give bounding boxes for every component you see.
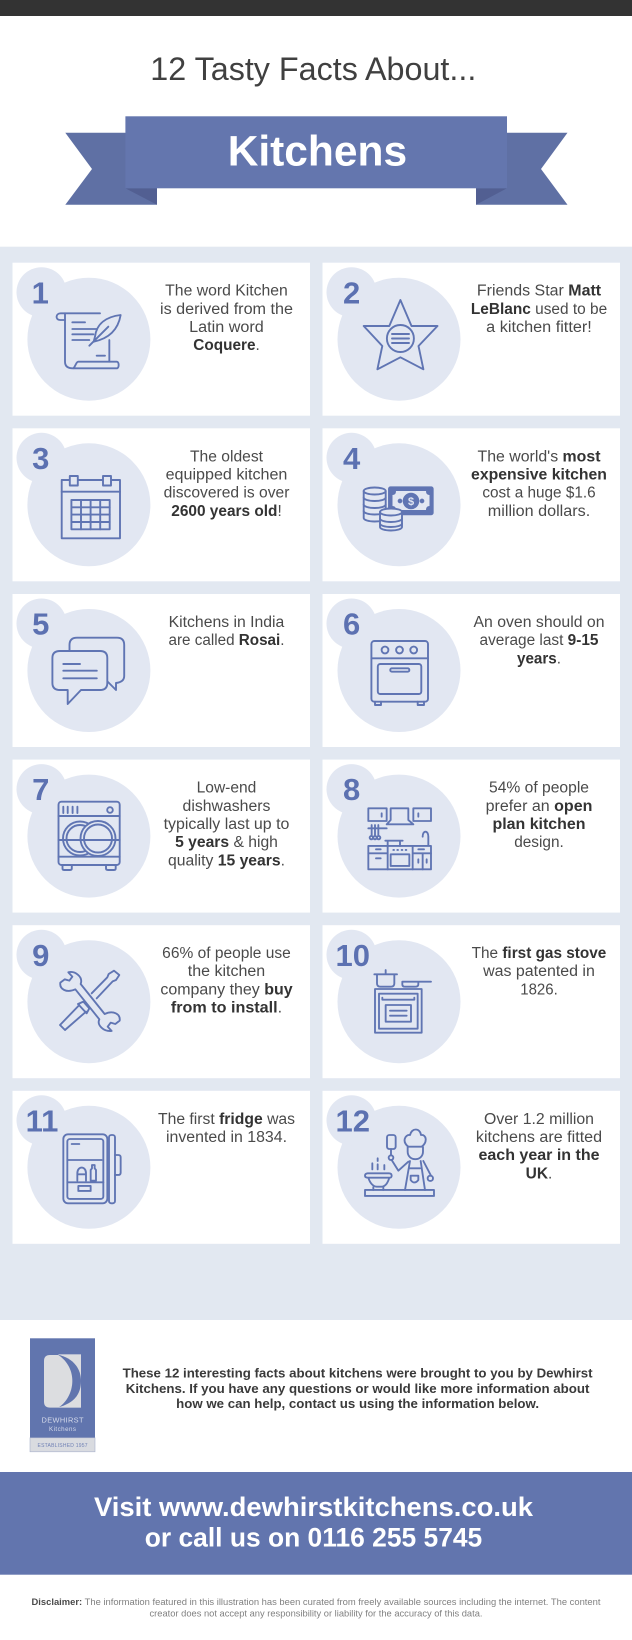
fact text: 54% of people	[489, 780, 589, 797]
ribbon centre	[125, 116, 507, 188]
fact text	[486, 780, 592, 851]
fact text: cost a huge $1.6	[482, 485, 596, 502]
icon: open fridge	[63, 1134, 121, 1203]
panel: fact 10	[322, 925, 620, 1078]
logo background	[30, 1338, 95, 1438]
card	[12, 925, 310, 1078]
fact text: invented in 1834.	[166, 1129, 287, 1146]
number 9: 9	[32, 938, 49, 973]
ribbon right tail	[476, 133, 568, 205]
logo established: ESTABLISHED 1957	[38, 1443, 88, 1449]
icon: oven	[371, 641, 428, 705]
title: 12 Tasty Facts About...	[150, 51, 476, 87]
closing text: Kitchens. If you have any questions or would like more information about	[126, 1381, 590, 1396]
card	[12, 263, 310, 416]
ribbon banner	[65, 116, 568, 205]
number 8: 8	[343, 772, 360, 807]
number 6: 6	[343, 607, 360, 642]
blob	[326, 598, 460, 732]
panel: fact 9	[12, 925, 310, 1078]
icon: speech bubbles	[52, 638, 124, 704]
fact text: Coquere.	[193, 337, 260, 354]
card	[12, 594, 310, 747]
fact text: plan kitchen	[492, 816, 586, 833]
panel: fact 5	[12, 594, 310, 747]
fact text: typically last up to	[164, 816, 289, 833]
fact text	[471, 448, 607, 520]
website line: Visit www.dewhirstkitchens.co.uk	[94, 1492, 534, 1522]
fact text: discovered is over	[164, 485, 289, 502]
logo: Dewhirst Kitchens	[30, 1338, 95, 1452]
fact text: company they buy	[160, 981, 293, 998]
blob	[16, 598, 150, 732]
card	[12, 1091, 310, 1244]
card	[12, 428, 310, 581]
blob	[16, 764, 150, 898]
blob	[16, 433, 150, 566]
number 1: 1	[32, 275, 49, 310]
blob	[326, 930, 460, 1063]
call to action bar	[0, 1472, 632, 1575]
fact text: expensive kitchen	[471, 466, 607, 484]
number 3: 3	[32, 441, 49, 476]
fact text: years.	[517, 650, 561, 667]
fact text: The world's most	[478, 448, 600, 465]
fact text	[472, 945, 607, 998]
panel: fact 12	[322, 1091, 620, 1244]
card	[322, 428, 620, 581]
phone line: or call us on 0116 255 5745	[145, 1523, 482, 1553]
closing text: These 12 interesting facts about kitchens were brought to you by Dewhirst	[123, 1366, 593, 1381]
fact text: Low-end	[197, 780, 256, 797]
ribbon left fold	[125, 188, 157, 205]
panel: fact 8	[322, 760, 620, 913]
fact text: dishwashers	[183, 798, 271, 815]
fact text: equipped kitchen	[166, 466, 287, 484]
panel: fact 11	[12, 1091, 310, 1244]
fact text: LeBlanc used to be	[471, 301, 607, 318]
fact text: each year in the	[478, 1147, 600, 1164]
fact text: million dollars.	[488, 503, 590, 520]
fact text	[160, 945, 293, 1016]
icon: calendar	[62, 476, 120, 538]
number 7: 7	[32, 772, 49, 807]
ribbon right fold	[476, 188, 507, 205]
card	[322, 925, 620, 1078]
fact text: The first fridge was	[158, 1111, 295, 1128]
ribbon left tail	[65, 133, 157, 205]
fact text: prefer an open	[486, 798, 592, 815]
icon: fitted kitchen	[368, 808, 431, 869]
fact text: design.	[514, 834, 564, 851]
logo D mark	[44, 1354, 81, 1408]
fact text: An oven should on	[474, 614, 604, 631]
fact text	[164, 780, 289, 869]
blob	[16, 930, 150, 1063]
fact text	[168, 614, 285, 649]
blob	[16, 267, 150, 401]
fact text: Friends Star Matt	[477, 283, 601, 300]
fact text: the kitchen	[188, 963, 265, 980]
blob	[16, 1095, 150, 1229]
icon: wrench and screwdriver	[60, 971, 120, 1031]
panel: fact 4	[322, 428, 620, 581]
card	[322, 760, 620, 913]
blob	[326, 267, 460, 401]
fact text: Kitchens in India	[169, 614, 285, 631]
disclaimer	[32, 1597, 601, 1620]
blob	[326, 433, 460, 566]
fact text: Over 1.2 million	[484, 1111, 594, 1128]
fact text: 2600 years old!	[171, 503, 282, 520]
bar	[0, 1472, 632, 1575]
icon: chef at counter	[365, 1129, 434, 1196]
number 10: 10	[336, 938, 370, 973]
fact text: 5 years & high	[175, 834, 278, 851]
fact text: UK.	[526, 1165, 552, 1182]
fact text	[474, 614, 604, 667]
panel: fact 3	[12, 428, 310, 581]
fact text	[164, 448, 289, 520]
card	[322, 263, 620, 416]
fact text: The first gas stove	[472, 945, 607, 962]
logo wordmark: DEWHIRST	[42, 1416, 84, 1424]
banner heading: Kitchens	[228, 128, 407, 176]
blob	[326, 764, 460, 898]
fact text: Latin word	[189, 319, 264, 336]
icon: dishwasher	[58, 802, 120, 870]
icon: cash and coins	[364, 487, 433, 531]
icon: star	[364, 300, 438, 369]
fact text	[160, 283, 293, 354]
number 4: 4	[343, 441, 361, 476]
panel: fact 6	[322, 594, 620, 747]
fact text	[471, 283, 607, 336]
card	[322, 594, 620, 747]
fact text: The word Kitchen	[165, 283, 288, 300]
fact text: was patented in	[482, 963, 595, 980]
fact text: are called Rosai.	[168, 632, 284, 649]
icon: stove with pots	[374, 970, 431, 1033]
fact text	[158, 1111, 295, 1146]
fact text: quality 15 years.	[168, 852, 285, 869]
number 11: 11	[26, 1103, 58, 1138]
disclaimer: Disclaimer: The information featured in this illustration has been curated from freely available sources including the internet. The content	[32, 1597, 601, 1608]
fact text: a kitchen fitter!	[486, 319, 592, 336]
logo footer strip	[30, 1438, 95, 1452]
fact text: is derived from the	[160, 301, 293, 318]
fact text	[476, 1111, 602, 1182]
pale section background	[0, 247, 632, 1320]
top dark bar	[0, 0, 632, 16]
panel: fact 2	[322, 263, 620, 416]
card	[322, 1091, 620, 1244]
closing text: how we can help, contact us using the information below.	[176, 1396, 539, 1411]
card	[12, 760, 310, 913]
closing text	[123, 1366, 593, 1411]
fact text: 66% of people use	[162, 945, 291, 962]
panel: fact 7	[12, 760, 310, 913]
fact text: average last 9-15	[480, 632, 599, 649]
number 5: 5	[32, 607, 49, 642]
logo sub-wordmark: Kitchens	[49, 1426, 76, 1433]
icon: scroll and quill	[57, 313, 121, 368]
fact text: kitchens are fitted	[476, 1129, 602, 1146]
blob	[326, 1095, 460, 1229]
number 12: 12	[336, 1103, 370, 1138]
fact text: The oldest	[190, 448, 264, 465]
fact text: 1826.	[520, 981, 558, 998]
disclaimer: creator does not accept any responsibility or liability for the accuracy of this data.	[150, 1609, 482, 1620]
number 2: 2	[343, 275, 360, 310]
icon: cash and coins: $	[408, 496, 414, 508]
panel: fact 1	[12, 263, 310, 416]
fact text: from to install .	[171, 1000, 282, 1016]
